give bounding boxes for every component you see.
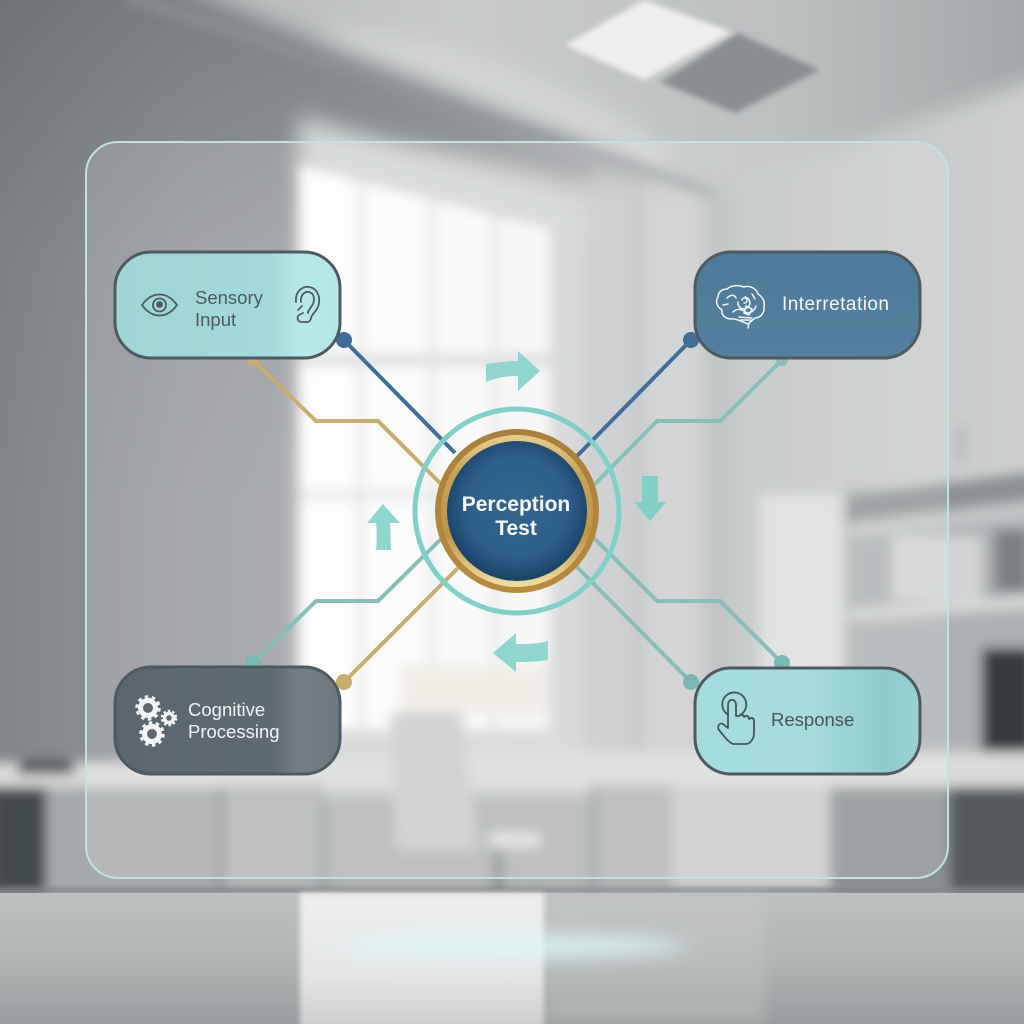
- blue core: [447, 441, 587, 581]
- glass panel: [86, 142, 948, 878]
- icon: eye: [142, 294, 177, 316]
- label: Sensory Input: Input: [195, 309, 236, 330]
- icon: touch hand: [718, 692, 754, 744]
- connector: cognitive processing to centre (gold): [336, 568, 458, 690]
- box: Response: [695, 668, 920, 774]
- window reflection on table: [300, 893, 544, 1024]
- connector: response to centre (teal): [594, 538, 790, 671]
- centre label: Perception: [462, 493, 570, 516]
- label: Cognitive Processing: Processing: [188, 721, 280, 742]
- arrow: right: [486, 351, 540, 391]
- box: Sensory Input: [115, 252, 340, 358]
- connector: cognitive processing to centre (teal): [245, 538, 442, 671]
- label: Interpretation (as spelled in source): Interretation: [782, 294, 889, 315]
- box: Interpretation: [695, 252, 920, 358]
- arrow: left: [493, 633, 548, 672]
- connector: sensory input to centre (blue): [336, 332, 455, 453]
- connector lines: [245, 332, 790, 690]
- centre node: Perception Test: Test: [495, 517, 537, 540]
- outer teal ring: [415, 409, 619, 613]
- label: Sensory Input: Sensory: [195, 287, 264, 308]
- icon: brain: [717, 286, 764, 328]
- gold ring: [435, 429, 599, 593]
- icon: ear: [296, 287, 319, 322]
- connector: interpretation to centre (teal): [594, 354, 788, 485]
- label: Response: Response: [771, 709, 854, 730]
- centre node: Perception Test: [415, 409, 619, 613]
- connector: response to centre (teal straight): [577, 567, 699, 690]
- box: Cognitive Processing: [115, 667, 340, 774]
- connector: interpretation to centre (blue): [577, 332, 699, 456]
- arrow: up: [367, 504, 400, 550]
- connector: sensory input to centre (gold): [247, 354, 442, 485]
- arrow: down: [634, 476, 666, 521]
- icon: gears: [137, 697, 176, 745]
- label: Cognitive Processing: Cognitive: [188, 699, 265, 720]
